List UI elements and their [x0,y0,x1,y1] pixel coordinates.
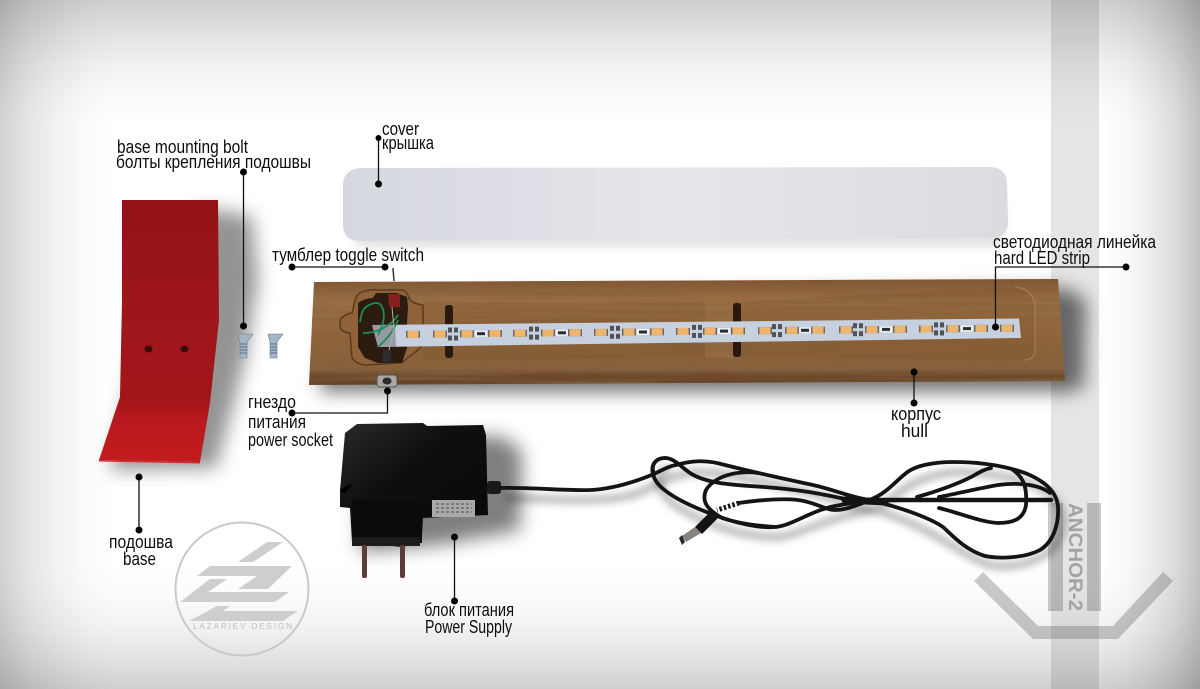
shadow: base [110,208,258,470]
logo: Lazariev Design [176,522,308,656]
toggle switch lever [393,268,394,281]
power supply [340,423,501,578]
callout: base: подошва [109,532,174,552]
callout: power socket: гнездо [248,392,296,412]
shadow: power supply [360,436,522,552]
mounting bolts [238,334,283,358]
callout: base mounting bolt: болты крепления подошвы [116,152,311,172]
callout: power socket: питания [248,412,306,432]
callout: power supply: Power Supply [425,617,512,637]
DC plug [679,503,739,545]
vertical grey band [1051,0,1099,689]
callout: hull: hull [901,421,928,441]
shadow: cover [352,192,1004,248]
channel for LED strip [423,287,1035,360]
power cable [500,458,1058,558]
callout: toggle switch: тумблер toggle switch [272,245,424,265]
hull (wood) [309,279,1065,385]
cover plate [343,167,1008,241]
shadow: cable [505,468,1063,566]
callout: power socket: power socket [248,430,333,450]
callout: LED strip: светодиодная линейка [993,232,1157,252]
wiring [360,303,398,362]
shadow: hull [320,288,1086,392]
pins [362,545,405,578]
electronics cavity [340,290,423,365]
callout: hull: корпус [891,404,941,424]
logo: Lazariev Design: LAZARIEV DESIGN [193,622,292,631]
LED strip [372,318,1021,347]
base plate (red) [99,200,219,464]
power socket [377,375,397,387]
callout: hull [891,368,941,441]
callout: cover: cover [382,119,419,139]
callout: base [109,474,174,569]
callout: cover: крышка [382,133,435,153]
callout: LED strip [992,232,1157,330]
callout: power socket [248,388,391,450]
logo: Anchor-2 mark: ANCHOR-2 [1064,503,1085,611]
callout: cover [375,119,435,188]
rating label [432,500,475,517]
callout: power supply [424,534,514,637]
callout: base: base [123,549,156,569]
callout: base mounting bolt: base mounting bolt [117,137,248,157]
callout: power supply: блок питания [424,600,514,620]
callout: base mounting bolt [116,137,311,330]
callout: toggle switch [272,245,424,270]
logo: Anchor-2 mark [974,503,1173,639]
callout: LED strip: hard LED strip [994,248,1090,268]
strain relief [487,481,501,494]
